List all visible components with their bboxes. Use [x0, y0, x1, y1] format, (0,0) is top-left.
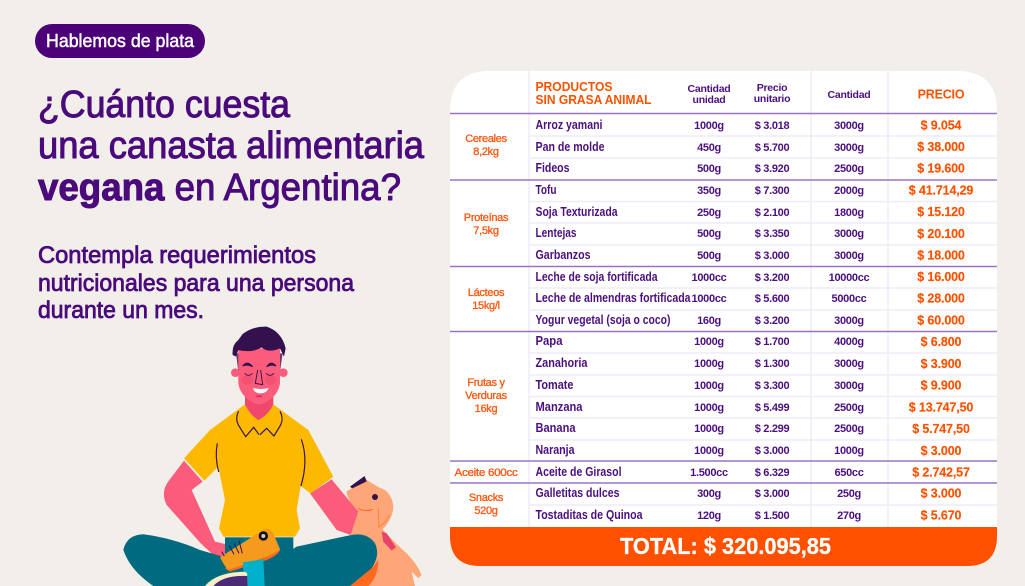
product names: Garbanzos [536, 248, 591, 262]
column: cantidad: 1000g [834, 445, 864, 457]
badge: Hablemos de plata: Hablemos de plata [46, 31, 195, 51]
column: precio unitario: $ 3.200 [755, 315, 789, 327]
product names: Pan de molde [536, 140, 605, 154]
left arm [164, 461, 244, 557]
column: cantidad: 250g [837, 488, 861, 500]
subtitle text: durante un mes. [38, 297, 204, 324]
column: cantidad unidad: 1000cc [692, 272, 727, 284]
table header: Cantidad [688, 83, 730, 95]
column: cantidad unidad: 300g [697, 488, 721, 500]
column: cantidad: 2500g [834, 402, 864, 414]
product names: Tomate [536, 378, 574, 392]
column: precio: $ 9.900 [921, 378, 962, 392]
shirt collar lines [216, 411, 305, 486]
table header: Precio [757, 82, 787, 94]
column: precio: $ 19.600 [917, 162, 965, 176]
subtitle text: nutricionales para una persona [38, 270, 355, 297]
column: precio unitario: $ 3.920 [755, 163, 789, 175]
column: cantidad: 3000g [834, 315, 864, 327]
column: cantidad unidad: 1000g [694, 423, 724, 435]
product names: Leche de soja fortificada [536, 270, 658, 284]
column: precio unitario: $ 1.300 [755, 358, 789, 370]
column: precio: $ 16.000 [917, 270, 965, 284]
column: cantidad: 1800g [834, 207, 864, 219]
column: cantidad unidad: 1000g [694, 380, 724, 392]
neck [245, 392, 273, 422]
product names: Tostaditas de Quinoa [536, 508, 643, 522]
table header: SIN GRASA ANIMAL [536, 92, 652, 107]
column: precio: $ 60.000 [917, 314, 965, 328]
table header: PRODUCTOS [536, 79, 613, 94]
column: precio unitario: $ 5.700 [755, 142, 789, 154]
column: cantidad: 5000cc [832, 293, 867, 305]
product names: Papa [536, 334, 563, 348]
column: precio: $ 13.747,50 [909, 400, 973, 414]
product names: Fideos [536, 161, 570, 175]
column: cantidad unidad: 1000g [694, 336, 724, 348]
column: precio unitario: $ 3.300 [755, 380, 789, 392]
column: cantidad unidad: 350g [697, 185, 721, 197]
subtitle text [38, 242, 355, 324]
category labels: Snacks [469, 492, 504, 504]
shirt [184, 404, 333, 537]
column: precio: $ 2.742,57 [912, 466, 970, 480]
column: precio [909, 118, 973, 522]
category labels: 15kg/l [472, 300, 500, 312]
column: precio: $ 28.000 [917, 292, 965, 306]
product names [536, 118, 691, 522]
illustration: man sitting with a phone and a dog [123, 327, 422, 586]
column: precio unitario: $ 1.500 [755, 510, 789, 522]
column: cantidad unidad: 1000g [694, 402, 724, 414]
dog [346, 476, 422, 586]
column: precio: $ 3.000 [921, 486, 962, 500]
column: cantidad unidad: 1000g [694, 358, 724, 370]
product names: Galletitas dulces [536, 486, 620, 500]
column: cantidad unidad: 500g [697, 250, 721, 262]
column: precio unitario: $ 3.000 [755, 445, 789, 457]
column: cantidad: 3000g [834, 142, 864, 154]
column: precio unitario [755, 120, 789, 522]
column: cantidad unidad: 120g [697, 510, 721, 522]
product names: Banana [536, 421, 576, 435]
table header: PRECIO [918, 88, 965, 102]
column: cantidad: 2500g [834, 423, 864, 435]
column: precio unitario: $ 2.100 [755, 207, 789, 219]
total bar [450, 527, 997, 566]
column: precio unitario: $ 3.018 [755, 120, 789, 132]
title: vegana en Argentina? [38, 167, 401, 209]
category labels [454, 133, 518, 517]
title: una canasta alimentaria [38, 125, 425, 167]
column: precio: $ 3.900 [921, 357, 962, 371]
table header: Cantidad [828, 89, 870, 101]
column: cantidad: 3000g [834, 120, 864, 132]
column: precio unitario: $ 1.700 [755, 336, 789, 348]
product names: Leche de almendras fortificada [536, 291, 691, 305]
column: precio: $ 9.054 [921, 118, 962, 132]
column: cantidad: 3000g [834, 358, 864, 370]
column: precio: $ 18.000 [917, 248, 965, 262]
badge: Hablemos de plata [35, 24, 205, 58]
category labels: Proteínas [464, 212, 509, 224]
head [231, 327, 288, 404]
category labels: Lácteos [468, 287, 505, 299]
category labels: Aceite 600cc [454, 467, 518, 479]
column: cantidad: 650cc [834, 467, 864, 479]
column: precio unitario: $ 2.299 [755, 423, 789, 435]
column: cantidad: 2500g [834, 163, 864, 175]
column: cantidad unidad: 450g [697, 142, 721, 154]
trousers [123, 534, 377, 586]
column: precio: $ 38.000 [917, 140, 965, 154]
category labels: Verduras [465, 390, 508, 402]
column: cantidad: 3000g [834, 250, 864, 262]
category labels: Cereales [465, 133, 508, 145]
column: cantidad unidad: 160g [697, 315, 721, 327]
table header [536, 79, 965, 107]
product names: Arroz yamani [536, 118, 602, 132]
column: cantidad unidad: 250g [697, 207, 721, 219]
product names: Yogur vegetal (soja o coco) [536, 313, 670, 327]
phone [220, 529, 280, 572]
product names: Manzana [536, 400, 583, 414]
title [38, 84, 425, 209]
total bar: TOTAL: $ 320.095,85 [620, 533, 831, 559]
product names: Zanahoria [536, 356, 588, 370]
table header: unitario [754, 93, 790, 105]
column: cantidad unidad: 500g [697, 163, 721, 175]
column: cantidad: 10000cc [829, 272, 870, 284]
table panel [450, 71, 997, 530]
column: precio: $ 5.670 [921, 508, 962, 522]
column: precio unitario: $ 7.300 [755, 185, 789, 197]
category labels: 520g [474, 505, 498, 517]
column: precio unitario: $ 3.000 [755, 488, 789, 500]
column: cantidad: 3000g [834, 228, 864, 240]
column: cantidad [829, 120, 870, 522]
product names: Soja Texturizada [536, 205, 618, 219]
row separators and column rules [529, 71, 997, 527]
column: precio unitario: $ 3.000 [755, 250, 789, 262]
column: cantidad unidad: 1000g [694, 120, 724, 132]
category labels: 8,2kg [473, 146, 499, 158]
column: precio unitario: $ 5.499 [755, 402, 789, 414]
column: precio: $ 3.000 [921, 444, 962, 458]
column: cantidad unidad: 1000cc [692, 293, 727, 305]
category labels: 7,5kg [473, 225, 499, 237]
column: cantidad unidad: 1000g [694, 445, 724, 457]
subtitle text: Contempla requerimientos [38, 242, 316, 269]
column: precio: $ 5.747,50 [912, 422, 970, 436]
column: precio: $ 20.100 [917, 227, 965, 241]
product names: Aceite de Girasol [536, 465, 622, 479]
column: cantidad unidad: 500g [697, 228, 721, 240]
table header: unidad [693, 94, 725, 106]
column: precio: $ 41.714,29 [909, 184, 973, 198]
column: cantidad: 4000g [834, 336, 864, 348]
right arm [310, 479, 358, 535]
product names: Naranja [536, 443, 575, 457]
title: ¿Cuánto cuesta [38, 84, 291, 126]
column: precio unitario: $ 3.350 [755, 228, 789, 240]
column: precio unitario: $ 6.329 [755, 467, 789, 479]
column: cantidad unidad [690, 120, 728, 522]
category labels: 16kg [475, 403, 498, 415]
shoe [205, 572, 247, 586]
category labels: Frutas y [467, 377, 505, 389]
column: precio unitario: $ 3.200 [755, 272, 789, 284]
product names: Lentejas [536, 226, 577, 240]
product names: Tofu [536, 183, 556, 197]
column: cantidad: 3000g [834, 380, 864, 392]
column: cantidad unidad: 1.500cc [690, 467, 728, 479]
sock [243, 559, 265, 586]
column: precio: $ 6.800 [921, 335, 962, 349]
column: precio: $ 15.120 [917, 205, 965, 219]
column: precio unitario: $ 5.600 [755, 293, 789, 305]
column: cantidad: 2000g [834, 185, 864, 197]
column: cantidad: 270g [837, 510, 861, 522]
